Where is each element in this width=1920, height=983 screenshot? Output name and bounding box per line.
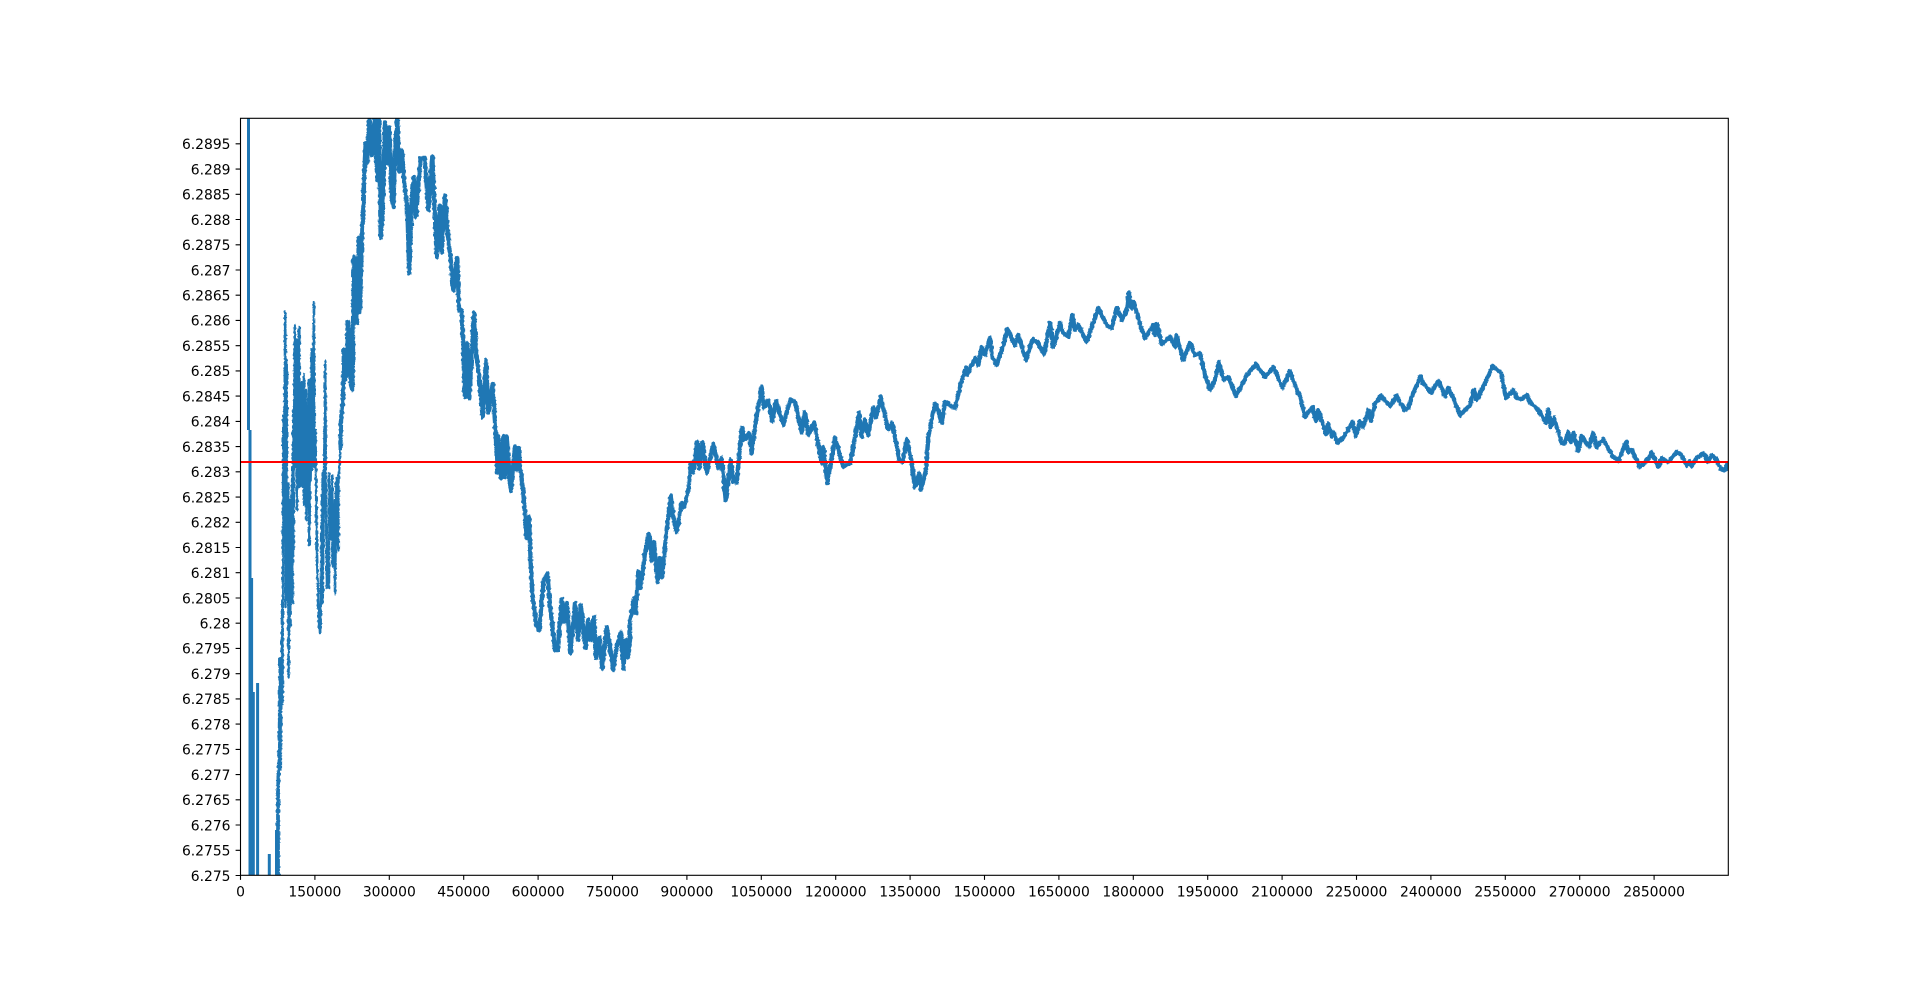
y axis tick labels: 6.284 — [191, 415, 231, 431]
axes frame — [240, 118, 1728, 875]
x axis tick labels: 1950000 — [1177, 884, 1239, 900]
y axis tick labels: 6.2775 — [182, 743, 230, 759]
x axis tick labels: 2400000 — [1400, 884, 1462, 900]
y axis tick labels: 6.2855 — [182, 339, 230, 355]
y axis tick labels: 6.2895 — [182, 137, 230, 153]
x axis tick labels: 2850000 — [1623, 884, 1685, 900]
x axis tick labels: 1500000 — [954, 884, 1015, 900]
y axis tick marks — [236, 144, 240, 876]
x axis tick labels: 2700000 — [1549, 884, 1611, 900]
x axis tick labels: 1200000 — [805, 884, 867, 900]
y axis tick labels: 6.277 — [191, 768, 230, 784]
x axis tick labels: 0 — [236, 884, 245, 900]
x axis tick labels: 2550000 — [1474, 884, 1536, 900]
y axis tick labels: 6.288 — [191, 213, 230, 229]
y axis tick labels: 6.287 — [191, 263, 230, 279]
y axis tick labels: 6.2805 — [182, 591, 230, 607]
x axis tick labels — [236, 884, 1685, 900]
y axis tick labels: 6.2875 — [182, 238, 230, 254]
x axis tick labels: 2100000 — [1251, 884, 1313, 900]
y axis tick labels: 6.2865 — [182, 288, 230, 304]
y axis tick labels: 6.2795 — [182, 642, 230, 658]
x axis tick labels: 1350000 — [879, 884, 941, 900]
y axis tick labels: 6.2755 — [182, 844, 230, 860]
y axis tick labels: 6.282 — [191, 516, 230, 532]
data series: blue running estimate curve — [248, 115, 1728, 875]
y axis tick labels: 6.276 — [191, 818, 230, 834]
y axis tick labels: 6.2835 — [182, 440, 230, 456]
y axis tick labels: 6.285 — [191, 364, 230, 380]
x axis tick labels: 900000 — [660, 884, 713, 900]
y axis tick labels: 6.283 — [191, 465, 230, 481]
y axis tick labels: 6.2765 — [182, 793, 230, 809]
x axis tick labels: 450000 — [437, 884, 490, 900]
y axis tick labels: 6.2815 — [182, 541, 230, 557]
x axis tick labels: 150000 — [288, 884, 341, 900]
y axis tick labels: 6.2825 — [182, 490, 230, 506]
y axis tick labels: 6.2845 — [182, 389, 230, 405]
x axis tick labels: 1050000 — [730, 884, 792, 900]
x axis tick labels: 750000 — [586, 884, 639, 900]
y axis tick labels — [182, 137, 231, 885]
x axis tick labels: 600000 — [512, 884, 565, 900]
y axis tick labels: 6.2885 — [182, 188, 230, 204]
y axis tick labels: 6.278 — [191, 717, 230, 733]
reference line: red horizontal at 6.2832 — [240, 461, 1728, 463]
y axis tick labels: 6.279 — [191, 667, 230, 683]
x axis tick labels: 1650000 — [1028, 884, 1090, 900]
x axis tick labels: 2250000 — [1326, 884, 1387, 900]
x axis tick marks — [240, 875, 1654, 880]
y axis tick labels: 6.2785 — [182, 692, 230, 708]
y axis tick labels: 6.275 — [191, 869, 230, 885]
y axis tick labels: 6.286 — [191, 314, 230, 330]
x axis tick labels: 300000 — [363, 884, 416, 900]
y axis tick labels: 6.28 — [200, 616, 230, 632]
x axis tick labels: 1800000 — [1102, 884, 1164, 900]
y axis tick labels: 6.281 — [191, 566, 230, 582]
line chart — [183, 118, 1729, 896]
y axis tick labels: 6.289 — [191, 162, 230, 178]
